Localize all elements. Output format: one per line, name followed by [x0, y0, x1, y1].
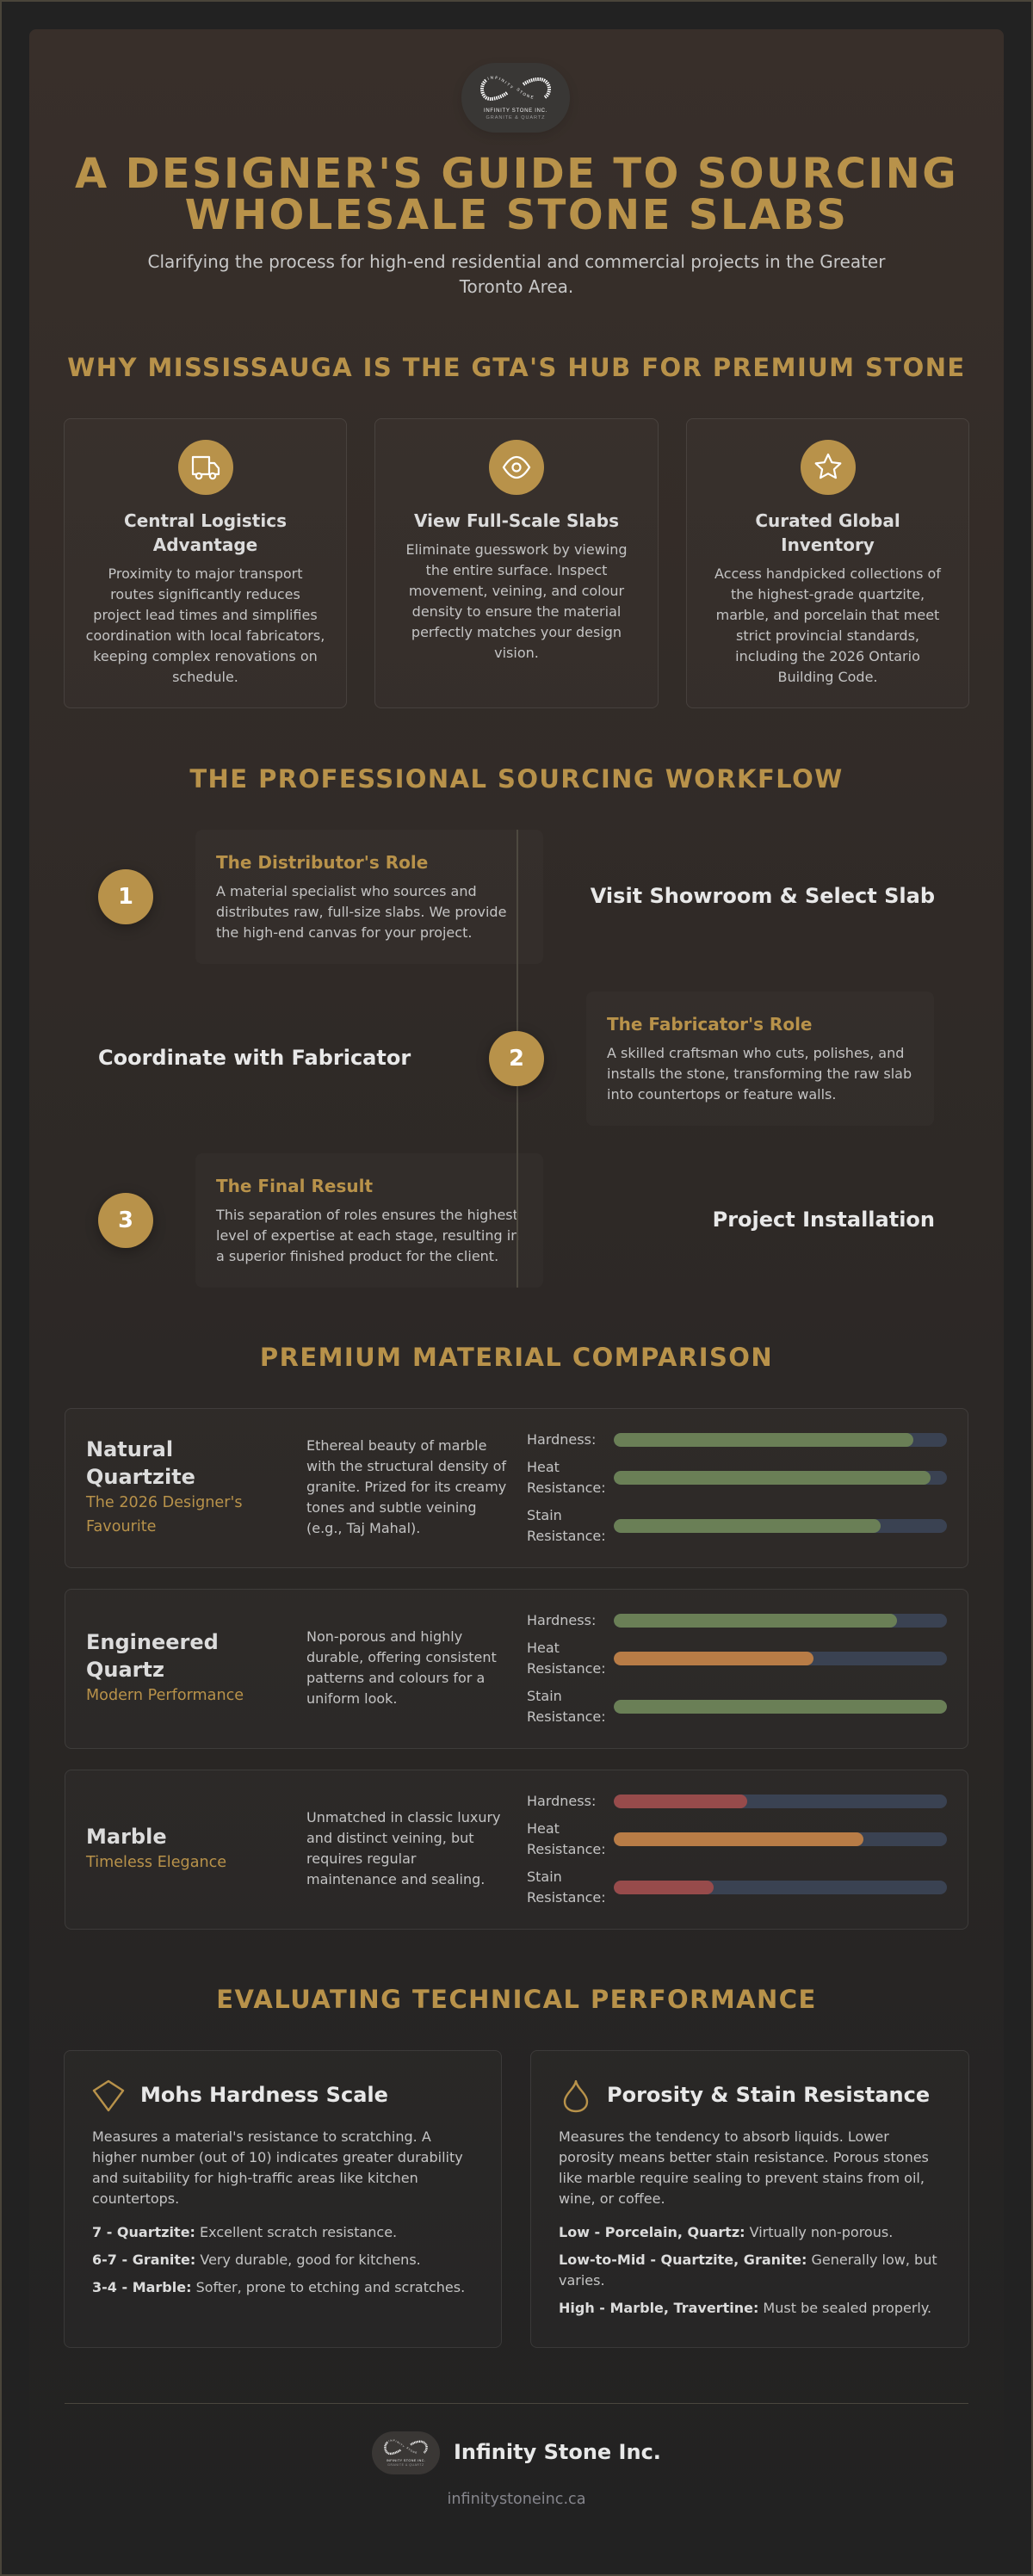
logo: Infinity Stone: GRANITE & QUARTZ [486, 115, 546, 120]
icon: drop [563, 2080, 589, 2112]
panel: engineered quartz [65, 1589, 968, 1749]
rating bars: Hardness: [527, 1793, 596, 1809]
logo: Infinity Stone: INFINITY [487, 76, 513, 88]
card text: Access handpicked collections of the highest-grade quartzite, marble, and porcelain that meet strict provincial standards, including the 2026 Ontario Building Code. [714, 565, 941, 685]
material description: Non-porous and highly durable, offering consistent patterns and colours for a uniform look. [306, 1628, 497, 1707]
footer divider [65, 2403, 968, 2404]
rating bars: Hardness: [527, 1431, 596, 1448]
rating bars: Heat Resistance: [527, 1640, 606, 1677]
material name: Engineered Quartz [86, 1630, 219, 1682]
rating bars: Stain Resistance: [527, 1507, 606, 1544]
card text: Eliminate guesswork by viewing the entire surface. Inspect movement, veining, and colour density to ensure the material perfectly matches your design vision. [405, 541, 628, 661]
rating bars: Hardness: [527, 1612, 596, 1628]
step 1 card: the high-end canvas for your project. [216, 924, 472, 941]
material tagline: Timeless Elegance [86, 1854, 226, 1871]
porosity items: Low-to-Mid - Quartzite, Granite: Generally low, but varies. [559, 2252, 937, 2289]
footer logo: STONE [406, 2447, 417, 2454]
rating bars: Stain Resistance: [527, 1869, 606, 1906]
rating bars [527, 1431, 947, 1544]
step 1 card: The Distributor's Role [216, 852, 428, 873]
step 3 card: This separation of roles ensures the highest [216, 1207, 518, 1223]
footer logo: INFINITY STONE INC. [387, 2459, 425, 2462]
rating bars [527, 1612, 947, 1725]
step 2 card: A skilled craftsman who cuts, polishes, and [607, 1045, 904, 1061]
porosity items: High - Marble, Travertine: Must be sealed properly. [559, 2300, 931, 2316]
material name: Natural Quartzite [86, 1437, 195, 1489]
card title: Central Logistics Advantage [124, 510, 287, 555]
card heading: Mohs Hardness Scale [140, 2083, 388, 2107]
panel: Mohs hardness [64, 2050, 502, 2348]
step number 2 [489, 1031, 544, 1086]
footer logo: GRANITE & QUARTZ [387, 2463, 424, 2467]
heading: workflow: THE PROFESSIONAL SOURCING WORKFLOW [189, 764, 844, 794]
material description: Ethereal beauty of marble with the structural density of granite. Prized for its creamy tones and subtle veining (e.g., Taj Mahal). [306, 1437, 506, 1536]
step number 1 [98, 869, 153, 924]
step 3 card: The Final Result [216, 1176, 373, 1196]
heading: why Mississauga: WHY MISSISSAUGA IS THE GTA'S HUB FOR PREMIUM STONE [67, 353, 966, 382]
step 2 card: into countertops or feature walls. [607, 1086, 836, 1103]
explanation: Measures a material's resistance to scratching. A higher number (out of 10) indicates greater durability and suitability for high-traffic areas like kitchen countertops. [92, 2128, 463, 2207]
step 1 card: A material specialist who sources and [216, 883, 477, 899]
footer logo [372, 2431, 440, 2474]
panel: marble [65, 1770, 968, 1930]
card title: View Full-Scale Slabs [414, 510, 619, 531]
panel: global inventory [686, 418, 969, 708]
footer logo: INFINITY [388, 2439, 405, 2448]
step 3 action: Project Installation [713, 1208, 935, 1232]
step number 3: 3 [118, 1208, 133, 1233]
panel: full scale slabs [374, 418, 659, 708]
step number 3 [98, 1193, 153, 1248]
material description: Unmatched in classic luxury and distinct veining, but requires regular maintenance and sealing. [306, 1809, 501, 1887]
icon: eye [489, 440, 544, 495]
step 2 action: Coordinate with Fabricator [98, 1046, 411, 1070]
card title: Curated Global Inventory [755, 510, 900, 555]
timeline line [516, 830, 518, 1288]
rating bars [527, 1793, 947, 1906]
rating bars: Stain Resistance: [527, 1688, 606, 1725]
step 1 card [195, 830, 543, 964]
icon: diamond [93, 2079, 124, 2112]
porosity items: Low - Porcelain, Quartz: Virtually non-porous. [559, 2224, 893, 2240]
title [75, 150, 958, 239]
material name: Marble [86, 1825, 167, 1849]
heading: technical performance: EVALUATING TECHNICAL PERFORMANCE [216, 1985, 817, 2014]
footer website: infinitystoneinc.ca [447, 2491, 586, 2508]
heading: comparison: PREMIUM MATERIAL COMPARISON [260, 1343, 773, 1372]
step number 1: 1 [118, 884, 133, 910]
panel: porosity [530, 2050, 969, 2348]
panel: central logistics [64, 418, 347, 708]
step 2 card [586, 991, 934, 1126]
logo: Infinity Stone: INFINITY STONE INC. [484, 108, 547, 114]
scale items: 3-4 - Marble: Softer, prone to etching and scratches. [92, 2279, 465, 2295]
step 3 card: level of expertise at each stage, resulting in [216, 1227, 519, 1244]
step 1 card: distributes raw, full-size slabs. We provide [216, 904, 506, 920]
logo: Infinity Stone: STONE [516, 88, 534, 99]
material tagline: The 2026 Designer's Favourite [86, 1494, 243, 1535]
rating bars: Heat Resistance: [527, 1459, 606, 1496]
scale items: 7 - Quartzite: Excellent scratch resistance. [92, 2224, 397, 2240]
step 3 card [195, 1153, 543, 1288]
footer company name: Infinity Stone Inc. [454, 2440, 661, 2464]
logo: Infinity Stone [461, 63, 570, 133]
scale items: 6-7 - Granite: Very durable, good for kitchens. [92, 2252, 421, 2268]
step 2 card: The Fabricator's Role [607, 1014, 813, 1035]
icon: truck [177, 440, 232, 495]
card heading: Porosity & Stain Resistance [607, 2083, 930, 2107]
material tagline: Modern Performance [86, 1687, 244, 1704]
step 3 card: a superior finished product for the client. [216, 1248, 498, 1264]
subtitle: Clarifying the process for high-end residential and commercial projects in the Greater Toronto Area. [148, 251, 885, 297]
explanation: Measures the tendency to absorb liquids. Lower porosity means better stain resistance. Porous stones like marble require sealing to prevent stains from oil, wine, or coffee. [559, 2128, 929, 2207]
title: A DESIGNER'S GUIDE TO SOURCING [75, 150, 958, 198]
panel: natural quartzite [65, 1408, 968, 1568]
rating bars: Heat Resistance: [527, 1820, 606, 1857]
card text: Proximity to major transport routes significantly reduces project lead times and simplifies coordination with local fabricators, keeping complex renovations on schedule. [86, 565, 325, 685]
step number 2: 2 [509, 1046, 524, 1072]
title: WHOLESALE STONE SLABS [185, 191, 848, 239]
icon: star [801, 440, 856, 495]
step 1 action: Visit Showroom & Select Slab [591, 884, 935, 908]
step 2 card: installs the stone, transforming the raw slab [607, 1066, 912, 1082]
